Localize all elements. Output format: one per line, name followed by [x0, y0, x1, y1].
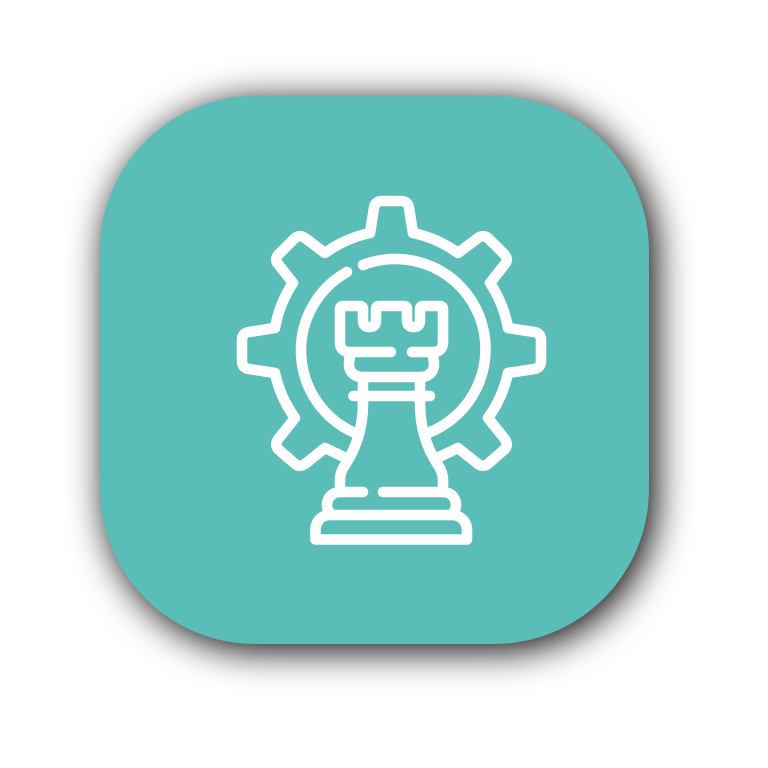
- panel: teal rounded card with shadow: [100, 96, 649, 644]
- icon: rook neck: [354, 377, 430, 396]
- icon: rook battlements: [340, 306, 443, 352]
- icon: inner ring: [301, 259, 486, 433]
- icon: rook body: [340, 396, 443, 492]
- icon: gear outline: [242, 201, 541, 466]
- icon: rook collar: [349, 354, 434, 377]
- icon: rook upper base: [327, 492, 456, 515]
- icon: rook lower base: [316, 515, 467, 540]
